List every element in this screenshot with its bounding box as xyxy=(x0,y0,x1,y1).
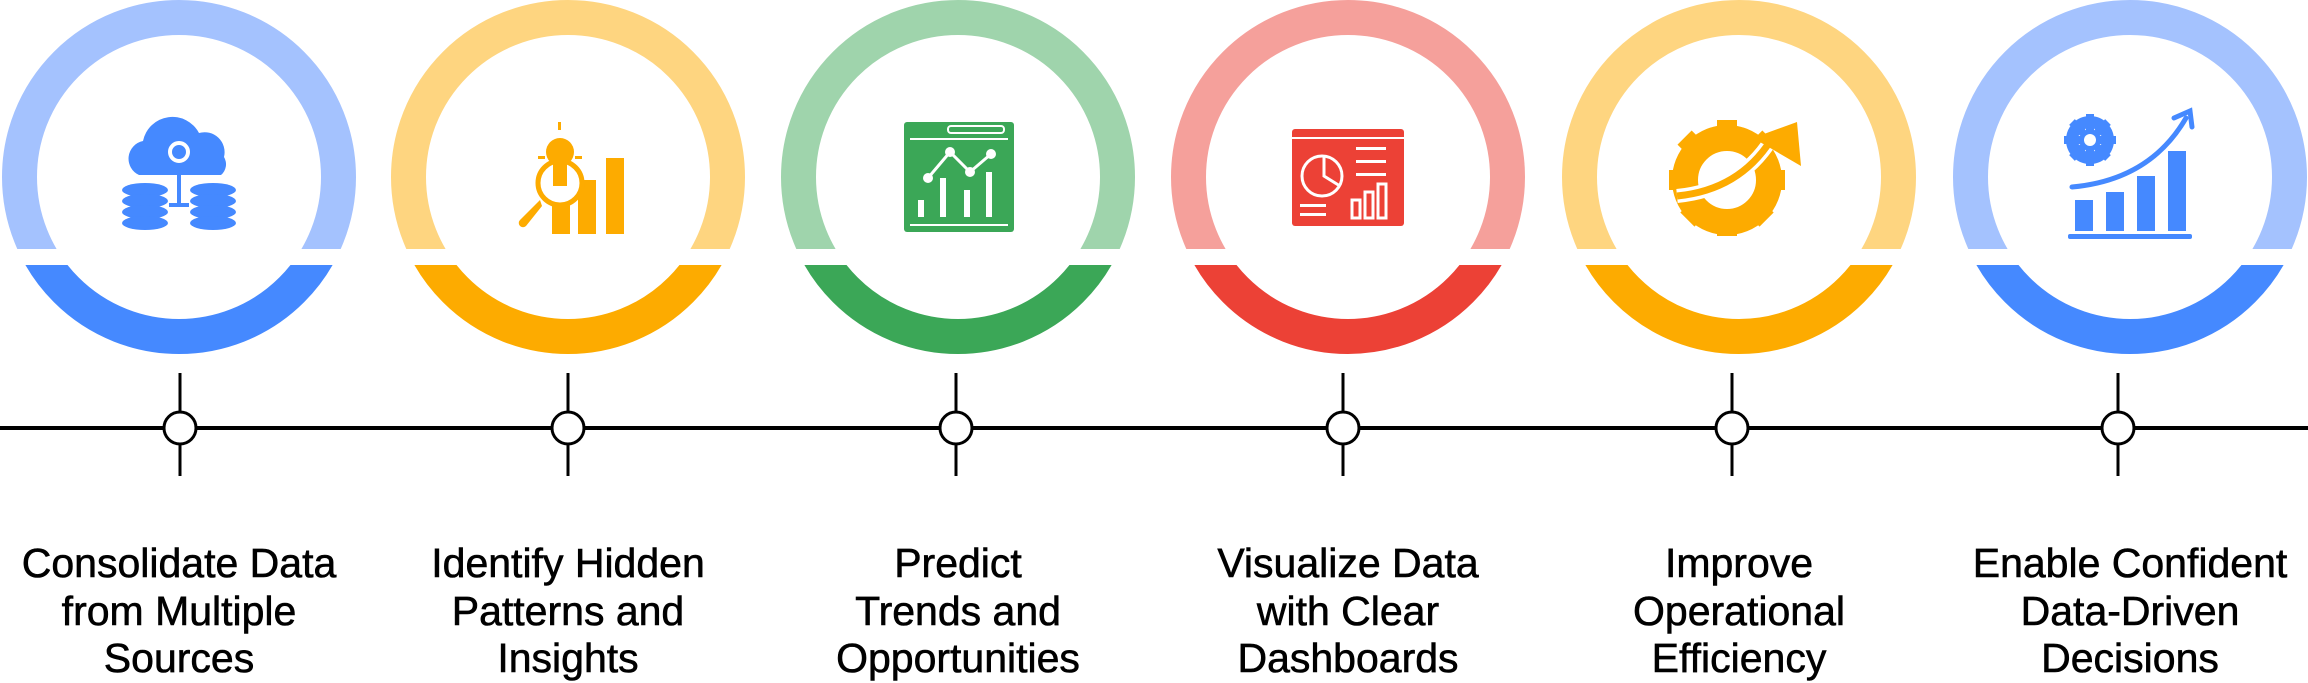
node 3 xyxy=(940,373,972,476)
ring 2 xyxy=(408,18,728,336)
icon: bulb insights xyxy=(519,122,624,234)
step 5: operational efficiency xyxy=(1580,18,1898,681)
icon: gear with arrow xyxy=(1669,120,1801,236)
label 6: Data-Driven xyxy=(2021,588,2239,634)
node 2 xyxy=(552,373,584,476)
node 1 xyxy=(164,373,196,476)
label 4: Visualize Data xyxy=(1217,540,1479,586)
ring 3 xyxy=(798,18,1118,336)
icon: dashboard xyxy=(1292,129,1404,226)
step 2: identify patterns xyxy=(408,18,728,681)
icon: cloud databases xyxy=(122,117,236,230)
label 3: Trends and xyxy=(855,588,1061,634)
step 4: visualize data xyxy=(1188,18,1508,681)
node 5 xyxy=(1716,373,1748,476)
node 4 xyxy=(1327,373,1359,476)
label 5: Improve xyxy=(1665,540,1813,586)
label 4: Dashboards xyxy=(1237,635,1459,681)
label 3: Opportunities xyxy=(836,635,1080,681)
label 3: Predict xyxy=(894,540,1022,586)
ring 4 xyxy=(1188,18,1508,336)
label 4: with Clear xyxy=(1256,588,1439,634)
label 5: Operational xyxy=(1633,588,1845,634)
step 1: consolidate data xyxy=(20,18,338,681)
ring 5 xyxy=(1580,18,1898,336)
label 1: Consolidate Data xyxy=(22,540,336,586)
node 6 xyxy=(2102,373,2134,476)
ring 1 xyxy=(20,18,338,336)
label 6: Enable Confident xyxy=(1973,540,2288,586)
label 1: Sources xyxy=(104,635,254,681)
label 2: Identify Hidden xyxy=(431,540,705,586)
label 1: from Multiple xyxy=(62,588,296,634)
label 2: Insights xyxy=(497,635,639,681)
label 6: Decisions xyxy=(2041,635,2219,681)
icon: growth chart xyxy=(2064,111,2192,239)
icon: trend dashboard xyxy=(904,122,1014,232)
step 3: predict trends xyxy=(798,18,1118,681)
label 5: Efficiency xyxy=(1652,635,1827,681)
ring 6 xyxy=(1970,18,2290,336)
step 6: data-driven decisions xyxy=(1970,18,2290,681)
timeline line xyxy=(0,426,2308,430)
label 2: Patterns and xyxy=(452,588,684,634)
